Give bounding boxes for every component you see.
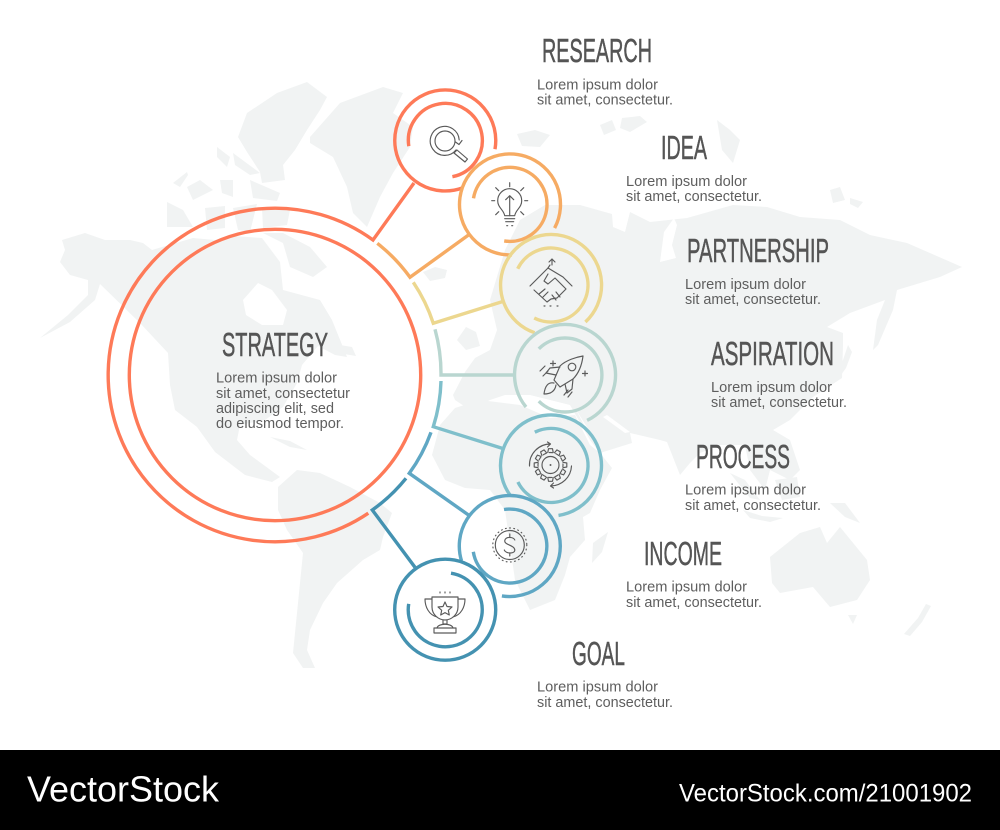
node: aspiration rings [515,324,616,420]
heading: process: PROCESS [696,438,790,475]
text: income body [626,580,762,611]
text: idea body: sit amet, consectetur. [626,189,762,205]
text: idea body [626,174,762,205]
text: aspiration body: Lorem ipsum dolor [711,380,832,396]
heading: aspiration: ASPIRATION [711,335,834,372]
text: goal body: sit amet, consectetur. [537,695,673,711]
text: strategy body: Lorem ipsum dolor [216,370,337,386]
node: goal rings [395,559,496,660]
connector: goal [372,478,415,567]
footer logo: VectorStock [27,768,220,810]
icon: magnifier with refresh arrow [430,126,468,162]
text: process body: sit amet, consectetur. [685,498,821,514]
connector: partnership [413,282,502,323]
node: idea rings [459,154,560,255]
icon: handshake [530,259,572,306]
text: aspiration body [711,380,847,411]
footer url: VectorStock.com/21001902 [679,780,972,808]
connector: idea [377,235,468,277]
heading: goal: GOAL [572,635,625,672]
node: income rings [459,496,560,597]
inner ring [129,229,421,521]
text: strategy body: do eiusmod tempor. [216,416,344,432]
heading: research: RESEARCH [542,32,652,69]
connector: income [409,432,468,515]
node: process rings [500,415,601,515]
node: partnership rings [501,234,602,333]
icon: gear with rotating arrows [529,442,572,488]
text: idea body: Lorem ipsum dolor [626,174,747,190]
text: research body: sit amet, consectetur. [537,92,673,108]
text: income body: sit amet, consectetur. [626,595,762,611]
icon: light bulb with arrow [492,183,528,226]
node: research rings [395,90,496,191]
panel: central strategy circle [108,183,421,542]
text: strategy body: adipiscing elit, sed [216,401,334,417]
text: aspiration body: sit amet, consectetur. [711,395,847,411]
heading: idea: IDEA [661,129,707,166]
text: strategy body [216,370,350,432]
icon: rocket [540,356,588,397]
connector: aspiration [435,329,515,375]
text: partnership body: sit amet, consectetur. [685,292,821,308]
text: strategy body: sit amet, consectetur [216,386,350,402]
text: partnership body: Lorem ipsum dolor [685,277,806,293]
text: goal body [537,680,673,711]
heading: strategy: STRATEGY [222,326,328,363]
text: goal body: Lorem ipsum dolor [537,680,658,696]
text: process body: Lorem ipsum dolor [685,482,806,498]
text: research body [537,78,673,108]
text: partnership body [685,277,821,308]
text: research body: Lorem ipsum dolor [537,78,658,94]
text: process body [685,482,821,514]
connector: process [433,381,502,448]
heading: income: INCOME [644,535,722,572]
panel: footer watermark bar [0,750,1000,830]
icon: trophy with star [425,592,465,633]
text: income body: Lorem ipsum dolor [626,580,747,596]
world map background [40,82,962,668]
heading: partnership: PARTNERSHIP [687,232,829,269]
outer ring with research connector [108,183,414,542]
icon: dollar coin [493,528,527,562]
